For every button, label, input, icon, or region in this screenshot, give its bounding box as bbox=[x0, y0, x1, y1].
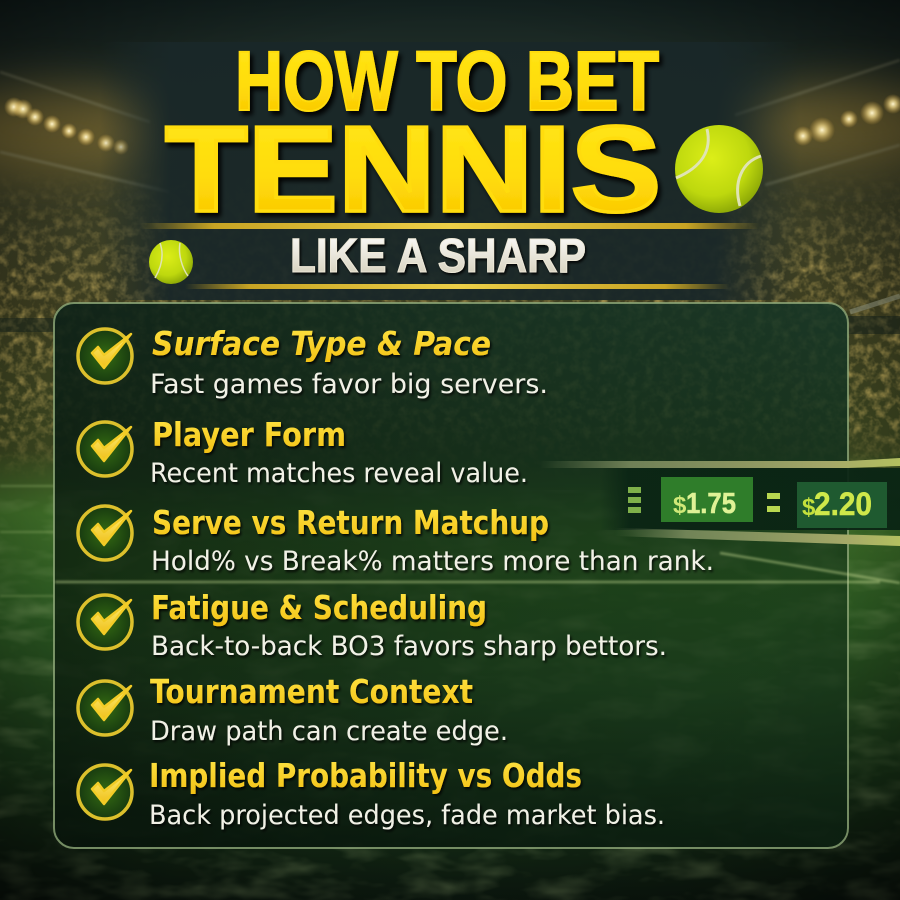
icon: check badge bbox=[78, 681, 132, 735]
title bbox=[140, 34, 760, 289]
icon: check badge bbox=[78, 506, 132, 560]
item: player form bbox=[78, 415, 528, 489]
right floodlights bbox=[793, 94, 900, 146]
icon: check badge bbox=[78, 765, 132, 819]
panel: betting checklist bbox=[54, 303, 900, 848]
item: serve vs return matchup: Serve vs Return Matchup bbox=[152, 503, 549, 542]
item: serve vs return matchup bbox=[78, 503, 714, 577]
item: surface type and pace: Fast games favor big servers. bbox=[150, 369, 548, 400]
title backing band bbox=[100, 42, 800, 300]
icon: small tennis ball bbox=[149, 240, 193, 284]
odds divider right bbox=[767, 493, 780, 512]
title line: how to bet: HOW TO BET bbox=[235, 34, 659, 128]
icon: check badge bbox=[78, 329, 132, 383]
upper gold rule bbox=[140, 223, 760, 229]
odds box 1.75: $ bbox=[673, 492, 687, 519]
item: serve vs return matchup: Hold% vs Break% matters more than rank. bbox=[151, 546, 714, 577]
item: fatigue and scheduling: Fatigue & Scheduling bbox=[151, 588, 487, 627]
icon: large tennis ball bbox=[675, 125, 763, 213]
item: fatigue and scheduling bbox=[78, 588, 667, 662]
odds box 2.20: 2.20 bbox=[814, 486, 872, 522]
item: implied probability vs odds: Back projected edges, fade market bias. bbox=[149, 800, 665, 831]
item: fatigue and scheduling: Back-to-back BO3 favors sharp bettors. bbox=[151, 631, 667, 662]
item: player form: Player Form bbox=[152, 415, 346, 454]
subtitle: like a sharp: LIKE A SHARP bbox=[290, 230, 586, 283]
odds divider left bbox=[628, 487, 641, 513]
item: tournament context: Tournament Context bbox=[150, 672, 473, 711]
odds box 1.75 bbox=[661, 477, 753, 522]
odds box 2.20 bbox=[797, 482, 887, 528]
item: tournament context: Draw path can create edge. bbox=[150, 716, 508, 747]
title line: tennis: TENNIS bbox=[165, 101, 661, 237]
item: player form: Recent matches reveal value. bbox=[150, 458, 528, 489]
item: surface type and pace bbox=[78, 324, 548, 400]
item: tournament context bbox=[78, 672, 508, 747]
lower gold rule bbox=[185, 284, 730, 289]
item: surface type and pace: Surface Type & Pace bbox=[152, 324, 491, 363]
odds scoreboard bbox=[540, 458, 900, 546]
item: implied probability vs odds bbox=[78, 756, 665, 831]
left floodlights bbox=[4, 97, 129, 155]
icon: check badge bbox=[78, 422, 132, 476]
icon: check badge bbox=[78, 595, 132, 649]
item: implied probability vs odds: Implied Probability vs Odds bbox=[149, 756, 582, 795]
odds box 2.20: $ bbox=[802, 494, 816, 521]
odds box 1.75: 1.75 bbox=[686, 488, 736, 520]
